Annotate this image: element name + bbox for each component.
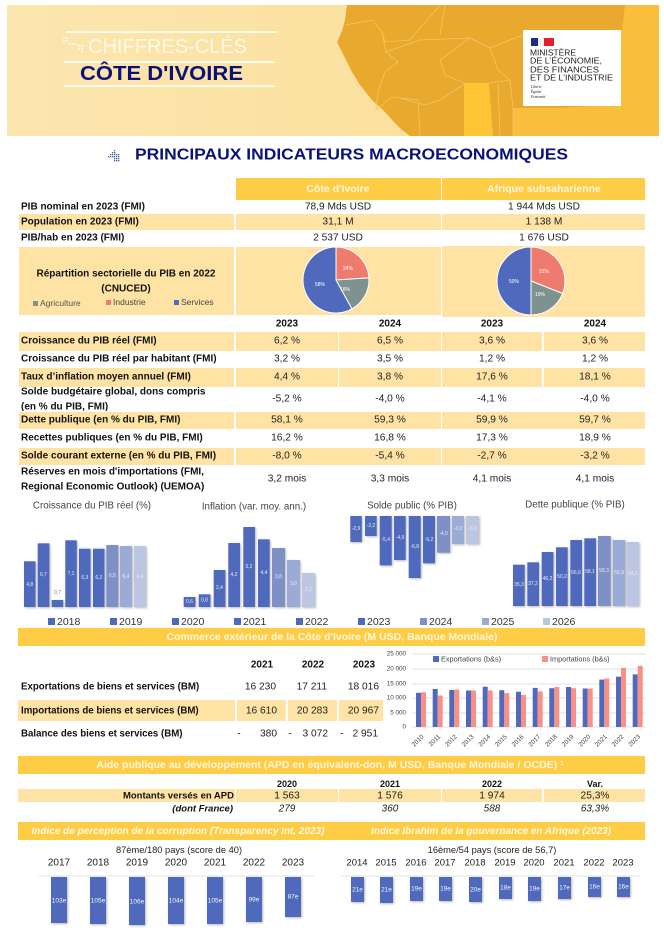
section heading: PRINCIPAUX INDICATEURS MACROECONOMIQUES xyxy=(135,146,568,164)
legend: years: 2020 xyxy=(181,616,205,628)
row: dette xyxy=(0,411,664,429)
table: commerce: 2 951 xyxy=(352,728,378,740)
table: commerce: 20 283 xyxy=(297,706,328,716)
row: PIB par habitant: 2 537 USD xyxy=(313,232,363,244)
row: solde budgétaire: -4,0 % xyxy=(580,394,610,404)
logo: ministère: Fraternité xyxy=(530,95,546,99)
panel: Ibrahim governance index: 2021 xyxy=(553,858,575,868)
chart: solde public: -5,4 xyxy=(381,537,390,543)
chart: dette publique: 56,6 xyxy=(571,570,581,576)
year headers: 2024 xyxy=(584,318,607,330)
chart: croissance: 0,7 xyxy=(54,590,61,596)
chart: croissance: 6,4 xyxy=(137,574,144,580)
pie chart: Côte d'Ivoire: 18% xyxy=(340,287,351,293)
row: recettes: 17,3 % xyxy=(476,432,508,444)
legend: sectors: Agriculture xyxy=(40,298,81,308)
chart: exportations et importations: 2022 xyxy=(611,733,626,748)
row: croissance: Croissance du PIB réel (FMI) xyxy=(21,336,157,346)
panel: corruption perception index: 105e xyxy=(208,898,223,904)
row: croissance: 3,6 % xyxy=(582,336,608,346)
panel: Ibrahim governance index: 2014 xyxy=(346,858,368,868)
heading: aide publique xyxy=(18,756,645,774)
table: APD: 279 xyxy=(278,804,296,814)
panel: Ibrahim governance index: 2015 xyxy=(375,858,397,868)
row: inflation: 4,4 % xyxy=(274,372,300,382)
heading: country: CÔTE D'IVOIRE xyxy=(80,61,243,85)
row: croissance par habitant: 1,2 % xyxy=(582,354,608,364)
chart: dette publique: 35,3 xyxy=(514,582,524,588)
chart: croissance: 6,7 xyxy=(40,572,47,578)
row: croissance: 3,6 % xyxy=(479,336,505,346)
row: recettes: Recettes publiques (en % du PIB, FMI) xyxy=(21,432,203,444)
pie chart: Afrique subsaharienne: 19% xyxy=(535,292,546,298)
table: APD: 588 xyxy=(484,804,501,814)
legend: years: 2019 xyxy=(119,616,143,628)
row: solde budgétaire xyxy=(21,386,610,412)
chart: solde public: -3,0 xyxy=(468,526,477,532)
chart: croissance xyxy=(24,500,151,607)
logo: ministère: Égalité xyxy=(530,89,542,94)
legend: years xyxy=(48,616,576,628)
row: dette: 59,9 % xyxy=(476,414,508,426)
table: APD: 2020 xyxy=(277,779,297,789)
row: PIB par habitant: 1 676 USD xyxy=(519,232,569,244)
table: commerce: Importations de biens et services (BM) xyxy=(21,706,199,716)
chart: dette publique: 37,2 xyxy=(528,581,538,587)
table: commerce: - xyxy=(288,728,292,740)
logo: ministère: DE L’ÉCONOMIE, xyxy=(530,56,602,66)
table: commerce: Balance des biens et services (BM) xyxy=(21,728,183,740)
legend: exportations et importations xyxy=(433,654,610,664)
row: réserves: Regional Economic Outlook) (UEMOA) xyxy=(21,482,204,492)
row: réserves xyxy=(21,466,614,492)
chart: exportations et importations: 25 000 xyxy=(387,650,406,658)
table: commerce: 16 230 xyxy=(245,682,276,692)
logo: ministère: DES FINANCES xyxy=(530,66,599,74)
row: inflation xyxy=(19,368,645,387)
chart: solde public: -4,9 xyxy=(396,535,405,541)
chart: exportations et importations xyxy=(387,650,646,748)
table: APD: 1 576 xyxy=(377,790,403,802)
row: solde courant: -8,0 % xyxy=(272,450,302,462)
row: croissance: 6,5 % xyxy=(377,336,403,346)
panel: corruption perception index: 2019 xyxy=(126,858,149,868)
panel: Ibrahim governance index: 19e xyxy=(529,886,540,892)
table: APD: Montants versés en APD xyxy=(123,790,234,802)
row: solde courant: -3,2 % xyxy=(580,450,610,462)
panel: corruption perception index: 2018 xyxy=(87,858,110,868)
row: inflation: 3,8 % xyxy=(377,372,403,382)
row: solde budgétaire: -5,2 % xyxy=(272,394,302,404)
row: recettes xyxy=(21,432,611,444)
legend: years: 2026 xyxy=(552,616,576,628)
chart: croissance: 6,3 xyxy=(81,575,88,581)
row: croissance: 6,2 % xyxy=(274,336,300,346)
chart: solde public: -2,2 xyxy=(367,523,376,529)
table: APD: 1 974 xyxy=(479,790,505,802)
chart: exportations et importations: 0 xyxy=(402,724,406,730)
panel: corruption perception index: Indice de perception de la corruption (Transparency Int, 2023) xyxy=(32,825,325,837)
title lines xyxy=(64,31,277,87)
logo: ministère: Liberté xyxy=(530,85,542,89)
row: dette: 58,1 % xyxy=(271,414,303,426)
chart: croissance: Croissance du PIB réel (%) xyxy=(33,500,151,512)
row: sector breakdown: (CNUCED) xyxy=(101,284,151,294)
row: PIB nominal: 78,9 Mds USD xyxy=(305,202,371,212)
panel: Ibrahim governance index: 16ème/54 pays (score de 56,7) xyxy=(428,845,556,855)
table: commerce: - xyxy=(340,728,344,740)
panel: Ibrahim governance index: 2018 xyxy=(464,858,486,868)
chart: solde public: -5,2 xyxy=(425,537,434,543)
chart: inflation: 3,0 xyxy=(290,581,297,587)
row: recettes: 16,8 % xyxy=(374,432,406,444)
row: dette: Dette publique (en % du PIB, FMI) xyxy=(21,414,180,426)
table: commerce: Exportations de biens et services (BM) xyxy=(21,682,199,692)
chart: exportations et importations: 2014 xyxy=(477,733,493,748)
row: population: Population en 2023 (FMI) xyxy=(21,216,139,228)
table: APD: (dont France) xyxy=(172,804,233,814)
table: APD: 63,3% xyxy=(581,804,609,814)
chart: dette publique: 54,1 xyxy=(628,571,638,577)
chart: solde public xyxy=(350,500,479,578)
row: solde courant: -5,4 % xyxy=(375,450,405,462)
row: solde budgétaire: (en % du PIB, FMI) xyxy=(21,402,108,412)
row: solde budgétaire: -4,1 % xyxy=(477,394,507,404)
panel: Ibrahim governance index: 17e xyxy=(559,884,570,892)
row: PIB nominal: 1 944 Mds USD xyxy=(508,202,580,212)
row: réserves: Réserves en mois d'importations (FMI, xyxy=(21,466,204,478)
chart: exportations et importations: 10 000 xyxy=(387,694,406,702)
table: commerce: 18 016 xyxy=(348,682,379,692)
legend: years: 2018 xyxy=(57,616,81,628)
pie chart: Côte d'Ivoire: 24% xyxy=(343,266,354,272)
panel: macro indicators table xyxy=(0,178,664,492)
row: croissance xyxy=(19,332,645,351)
panel: corruption perception index: 104e xyxy=(169,898,184,904)
chart: inflation: 4,4 xyxy=(261,570,268,576)
legend: years: 2025 xyxy=(491,616,515,628)
chart: croissance: 6,4 xyxy=(123,574,130,580)
chart: exportations et importations: 2019 xyxy=(561,733,576,748)
legend: years: 2024 xyxy=(429,616,453,628)
row: recettes: 18,9 % xyxy=(579,432,611,444)
year headers xyxy=(276,318,607,330)
row: réserves: 4,1 mois xyxy=(576,474,614,484)
chart: inflation: 0,6 xyxy=(186,599,193,605)
table: commerce: 380 xyxy=(260,728,277,740)
chart: inflation: 5,2 xyxy=(246,564,253,570)
row: réserves: 3,2 mois xyxy=(268,474,306,484)
chart: dette publique: 46,2 xyxy=(543,576,553,582)
panel: corruption perception index: 2021 xyxy=(204,858,227,868)
panel: corruption perception index: 103e xyxy=(52,898,67,904)
logo: ministère xyxy=(523,30,621,106)
banner xyxy=(7,5,659,136)
chart: dette publique: 55,9 xyxy=(614,570,624,576)
chart: dette publique: 59,3 xyxy=(599,568,609,574)
chart: inflation: 2,2 xyxy=(305,587,312,593)
panel: corruption perception index: 87ème/180 pays (score de 40) xyxy=(116,845,242,855)
panel: corruption perception index: 2022 xyxy=(243,858,266,868)
table: commerce: 3 072 xyxy=(302,728,328,740)
row: PIB nominal: PIB nominal en 2023 (FMI) xyxy=(21,202,145,212)
chart: exportations et importations: 2011 xyxy=(428,733,443,748)
table: commerce: 16 610 xyxy=(246,706,277,716)
panel: Ibrahim governance index: 19e xyxy=(411,886,422,892)
chart: croissance: 4,8 xyxy=(26,582,33,588)
table: APD: 25,3% xyxy=(581,790,609,802)
column header: Afrique subsaharienne: Afrique subsaharienne xyxy=(487,183,601,195)
row: dette: 59,3 % xyxy=(374,414,406,426)
table: commerce: 17 211 xyxy=(297,682,327,692)
panel: Ibrahim governance index: 2020 xyxy=(523,858,545,868)
panel: Ibrahim governance index: 2022 xyxy=(583,858,605,868)
chart: solde public: Solde public (% PIB) xyxy=(367,500,457,512)
panel: Ibrahim governance index: 18e xyxy=(500,884,511,892)
logo: ministère: MINISTÈRE xyxy=(530,48,576,58)
map of West Africa xyxy=(337,5,659,136)
legend: sectors xyxy=(33,297,214,308)
panel: corruption perception index: 99e xyxy=(249,896,260,904)
panel: Ibrahim governance index xyxy=(332,822,645,903)
column header: Côte d'Ivoire xyxy=(236,178,441,200)
row: sector breakdown: Répartition sectorielle du PIB en 2022 xyxy=(37,268,216,280)
chart: inflation: 2,4 xyxy=(216,585,223,591)
panel: corruption perception index: 2023 xyxy=(282,858,305,868)
chart: inflation: Inflation (var. moy. ann.) xyxy=(202,502,306,512)
chart: croissance: 6,5 xyxy=(109,573,116,579)
row: solde courant: -2,7 % xyxy=(477,450,507,462)
row: croissance par habitant: Croissance du PIB réel par habitant (FMI) xyxy=(21,354,217,364)
panel: Ibrahim governance index: 2017 xyxy=(434,858,456,868)
chart: solde public: -3,0 xyxy=(454,526,463,532)
chart: exportations et importations: 15 000 xyxy=(387,680,406,688)
row: recettes: 16,2 % xyxy=(271,432,303,444)
panel: Ibrahim governance index: 21e xyxy=(352,886,363,894)
pie chart: Afrique subsaharienne: 31% xyxy=(539,269,550,275)
legend: exportations et importations: Importations (b&s) xyxy=(550,654,610,664)
panel: Ibrahim governance index: 21e xyxy=(381,886,392,894)
row: réserves: 4,1 mois xyxy=(473,474,511,484)
panel: Ibrahim governance index: 2016 xyxy=(405,858,427,868)
row: croissance par habitant: 1,2 % xyxy=(479,354,505,364)
panel: Ibrahim governance index: 20e xyxy=(470,886,481,894)
icon: pixel squares xyxy=(63,37,83,53)
panel: Ibrahim governance index: Indice Ibrahim de la gouvernance en Afrique (2023) xyxy=(371,825,611,837)
panel: Ibrahim governance index: 19e xyxy=(440,886,451,892)
chart: exportations et importations: 2021 xyxy=(594,733,609,748)
row: solde budgétaire: -4,0 % xyxy=(375,394,405,404)
legend: exportations et importations: Exportations (b&s) xyxy=(441,654,501,664)
chart: inflation: 4,2 xyxy=(231,572,238,578)
table: commerce: 2022 xyxy=(302,660,325,670)
panel: corruption perception index: 2017 xyxy=(48,858,71,868)
row: inflation: 17,6 % xyxy=(476,372,508,382)
table: commerce: 2021 xyxy=(251,660,274,670)
chart: dette publique xyxy=(513,500,639,606)
row: population: 1 138 M xyxy=(526,216,562,228)
chart: exportations et importations: 20 000 xyxy=(387,666,406,672)
row: inflation: 18,1 % xyxy=(579,372,611,382)
pie chart: Côte d'Ivoire: 58% xyxy=(315,282,326,288)
table: APD: 2022 xyxy=(482,779,502,789)
row: solde budgétaire: Solde budgétaire global, dons compris xyxy=(21,386,206,398)
table: commerce: - xyxy=(237,728,241,740)
row: sector breakdown xyxy=(19,246,645,317)
chart: solde public: -4,0 xyxy=(439,531,448,537)
chart: inflation: 0,8 xyxy=(201,598,208,604)
column header: Afrique subsaharienne xyxy=(442,178,645,200)
chart: solde public: -2,9 xyxy=(352,526,361,532)
panel: corruption perception index: 105e xyxy=(91,898,106,904)
panel: Ibrahim governance index: 2023 xyxy=(612,858,634,868)
chart: exportations et importations: 5 000 xyxy=(390,710,406,716)
pie chart: Afrique subsaharienne: 50% xyxy=(509,279,520,285)
row: solde courant: Solde courant externe (en % du PIB, FMI) xyxy=(21,450,216,462)
heading: chiffres-clés: CHIFFRES-CLÉS xyxy=(88,35,247,58)
logo: ministère: ET DE L’INDUSTRIE xyxy=(530,74,613,82)
heading: commerce extérieur xyxy=(18,628,645,646)
legend: years: 2022 xyxy=(305,616,329,628)
chart: exportations et importations: 2010 xyxy=(411,733,426,748)
panel: Ibrahim governance index: 2019 xyxy=(494,858,516,868)
table: commerce: 2023 xyxy=(353,660,376,670)
legend: years: 2021 xyxy=(243,616,267,628)
table: APD: 360 xyxy=(382,804,399,814)
chart: exportations et importations: 2023 xyxy=(627,733,643,748)
panel: Ibrahim governance index: 16e xyxy=(589,884,600,890)
row: dette: 59,7 % xyxy=(579,414,611,426)
pie chart: Afrique subsaharienne xyxy=(497,247,565,315)
chart: exportations et importations: 2017 xyxy=(527,733,543,748)
row: PIB par habitant: PIB/hab en 2023 (FMI) xyxy=(21,232,124,244)
table: APD xyxy=(18,779,645,814)
panel: corruption perception index xyxy=(18,822,332,925)
row: population xyxy=(19,214,645,230)
year headers: 2024 xyxy=(379,318,402,330)
row: croissance par habitant: 3,2 % xyxy=(274,354,300,364)
table: commerce: 20 967 xyxy=(348,706,379,716)
table: commerce xyxy=(18,660,383,740)
year headers: 2023 xyxy=(276,318,299,330)
pie chart: Côte d'Ivoire xyxy=(303,247,369,313)
chart: exportations et importations: 2015 xyxy=(494,733,509,748)
row: croissance par habitant: 3,5 % xyxy=(377,354,403,364)
table: APD: 1 563 xyxy=(274,790,300,802)
row: PIB nominal xyxy=(21,202,580,212)
chart: inflation: 3,8 xyxy=(275,574,282,580)
legend: sectors: Services xyxy=(181,297,214,307)
heading: aide publique: Aide publique au développement (APD en équivalent-don, M USD, Banque Mondiale / OCDE) ¹ xyxy=(96,759,564,771)
chart: dette publique: Dette publique (% PIB) xyxy=(525,500,625,510)
heading: commerce extérieur: Commerce extérieur de la Côte d'Ivoire (M USD, Banque Mondiale) xyxy=(166,631,498,643)
legend: sectors: Industrie xyxy=(113,297,146,307)
row: PIB par habitant xyxy=(21,232,569,244)
row: inflation: Taux d’inflation moyen annuel (FMI) xyxy=(21,372,191,382)
panel: corruption perception index: 2020 xyxy=(165,858,188,868)
row: réserves: 3,3 mois xyxy=(371,474,409,484)
chart: dette publique: 58,1 xyxy=(585,569,595,575)
row: population: 31,1 M xyxy=(322,216,354,228)
chart: croissance: 7,1 xyxy=(68,571,75,577)
row: croissance par habitant xyxy=(21,354,608,364)
panel: corruption perception index: 87e xyxy=(288,894,299,900)
chart: solde public: -6,8 xyxy=(410,544,419,550)
panel: Ibrahim governance index: 16e xyxy=(618,884,629,890)
panel: corruption perception index: 106e xyxy=(130,898,145,906)
chart: inflation xyxy=(184,502,315,607)
chart: exportations et importations: 2013 xyxy=(461,733,476,748)
table: APD: Var. xyxy=(587,779,603,789)
year headers: 2023 xyxy=(481,318,504,330)
legend: years: 2023 xyxy=(367,616,391,628)
row: solde courant xyxy=(19,448,645,465)
chart: exportations et importations: 2016 xyxy=(511,733,526,748)
icon: dot pyramid xyxy=(108,150,119,161)
chart: dette publique: 50,2 xyxy=(557,574,567,580)
column header: Côte d'Ivoire: Côte d'Ivoire xyxy=(306,183,370,195)
chart: croissance: 6,2 xyxy=(95,575,102,581)
chart: exportations et importations: 2018 xyxy=(544,733,559,748)
table: APD: 2021 xyxy=(380,779,400,789)
chart: exportations et importations: 2012 xyxy=(444,733,459,748)
chart: exportations et importations: 2020 xyxy=(577,733,593,748)
